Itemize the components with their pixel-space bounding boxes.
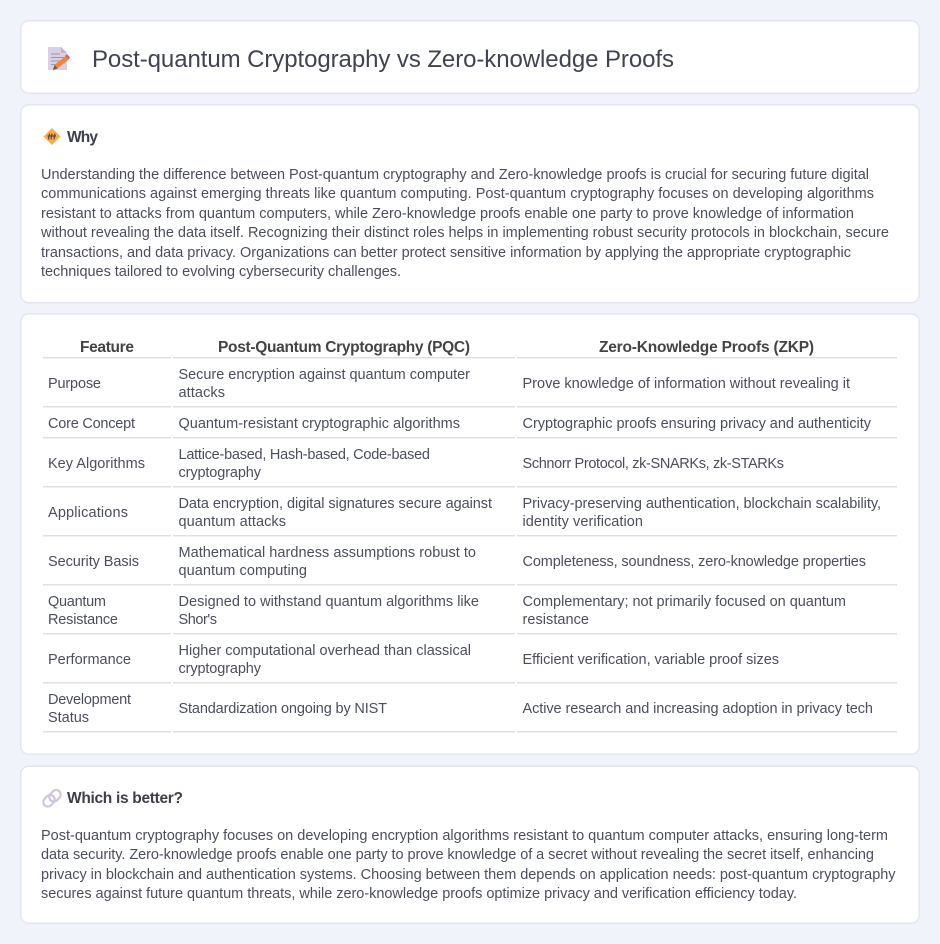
text block: why paragraph: techniques tailored to evolving cybersecurity challenges. [41, 264, 401, 280]
row: key algorithms: cryptography [178, 465, 262, 481]
row: quantum resistance: Resistance [48, 612, 118, 628]
row: key algorithms: Lattice-based, Hash-based, Code-based [178, 447, 430, 463]
icon: document with pencil [48, 47, 70, 70]
heading: why: Why [67, 129, 98, 146]
row: core concept: Cryptographic proofs ensuring privacy and authenticity [522, 416, 872, 432]
text block: which is better paragraph: secures against future quantum threats, while zero-knowledge proofs optimize privacy and verification efficiency today. [41, 886, 797, 902]
row: applications: Applications [48, 505, 128, 521]
text block: why paragraph: Understanding the difference between Post-quantum cryptography and Zero-knowledge proofs is crucial for securing future digital [41, 167, 869, 183]
row: applications [48, 496, 881, 530]
row: key algorithms: Schnorr Protocol, zk-SNARKs, zk-STARKs [522, 456, 784, 472]
row: development status [48, 692, 873, 726]
panel: why [21, 105, 919, 303]
row: applications: quantum attacks [178, 514, 286, 530]
row: performance: Performance [48, 652, 131, 668]
row: performance: Higher computational overhead than classical [178, 643, 471, 659]
row: key algorithms [48, 447, 784, 481]
table header row: Feature [80, 339, 134, 356]
text block: which is better paragraph: data security. Zero-knowledge proofs enable one party to prove knowledge of a secret without revealing the secret itself, enhancing [41, 847, 874, 863]
row: applications: identity verification [522, 514, 643, 530]
text block: why paragraph: without revealing the data itself. Recognizing their distinct roles helps in implementing robust security protocols in blockchain, secure [40, 225, 889, 241]
row: security basis: Completeness, soundness, zero-knowledge properties [522, 554, 866, 570]
row: purpose [48, 367, 850, 401]
table header row [80, 339, 814, 356]
row: security basis: Security Basis [48, 554, 139, 570]
heading: which is better: Which is better? [67, 790, 183, 807]
row: quantum resistance: Quantum [48, 594, 106, 610]
panel: comparison table [21, 314, 919, 754]
row: quantum resistance: Designed to withstand quantum algorithms like [178, 594, 479, 610]
row: core concept: Core Concept [48, 416, 135, 432]
text block: why paragraph [40, 167, 889, 280]
row: development status: Development [48, 692, 131, 708]
row: development status: Active research and increasing adoption in privacy tech [522, 701, 873, 717]
table header row: Post-Quantum Cryptography (PQC) [218, 339, 470, 356]
row: development status: Status [48, 710, 89, 726]
row: key algorithms: Key Algorithms [48, 456, 145, 472]
panel: which is better [21, 766, 919, 923]
row: purpose: attacks [178, 385, 225, 401]
row: applications: Privacy-preserving authentication, blockchain scalability, [522, 496, 881, 512]
row: performance: cryptography [178, 661, 262, 677]
icon: chain link [41, 788, 63, 808]
row: development status: Standardization ongoing by NIST [178, 701, 387, 717]
text block: which is better paragraph: privacy in blockchain and authentication systems. Choosing between them depends on application needs: post-quantum cryptography [41, 867, 896, 883]
text block: why paragraph: transactions, and data privacy. Organizations can better protect sensitive information by applying the appropriate cryptographic [41, 245, 851, 261]
row: performance: Efficient verification, variable proof sizes [522, 652, 779, 668]
text block: why paragraph: resistant to attacks from quantum computers, while Zero-knowledge proofs enable one party to prove knowledge of information [41, 206, 854, 222]
row: security basis: quantum computing [178, 563, 307, 579]
row: quantum resistance: resistance [522, 612, 589, 628]
text block: why paragraph: communications against emerging threats like quantum computing. Post-quantum cryptography focuses on developing algorithms [41, 186, 874, 202]
row: performance [48, 643, 779, 677]
row: quantum resistance [48, 594, 846, 628]
row: applications: Data encryption, digital signatures secure against [178, 496, 492, 512]
row: quantum resistance: Shor's [178, 612, 217, 628]
row: core concept [48, 416, 872, 432]
row: core concept: Quantum-resistant cryptographic algorithms [178, 416, 460, 432]
icon: orange diamond sign [44, 128, 60, 145]
text block: which is better paragraph [41, 828, 896, 902]
text block: which is better paragraph: Post-quantum cryptography focuses on developing encryption algorithms resistant to quantum computer attacks, ensuring long-term [41, 828, 888, 844]
row: purpose: Purpose [48, 376, 101, 392]
row: security basis: Mathematical hardness assumptions robust to [178, 545, 476, 561]
row: purpose: Secure encryption against quantum computer [178, 367, 470, 383]
title: Post-quantum Cryptography vs Zero-knowledge Proofs [92, 46, 674, 73]
row: quantum resistance: Complementary; not primarily focused on quantum [522, 594, 846, 610]
table header row: Zero-Knowledge Proofs (ZKP) [599, 339, 814, 356]
row: purpose: Prove knowledge of information without revealing it [522, 376, 850, 392]
row: security basis [48, 545, 866, 579]
panel: title header [21, 21, 919, 93]
